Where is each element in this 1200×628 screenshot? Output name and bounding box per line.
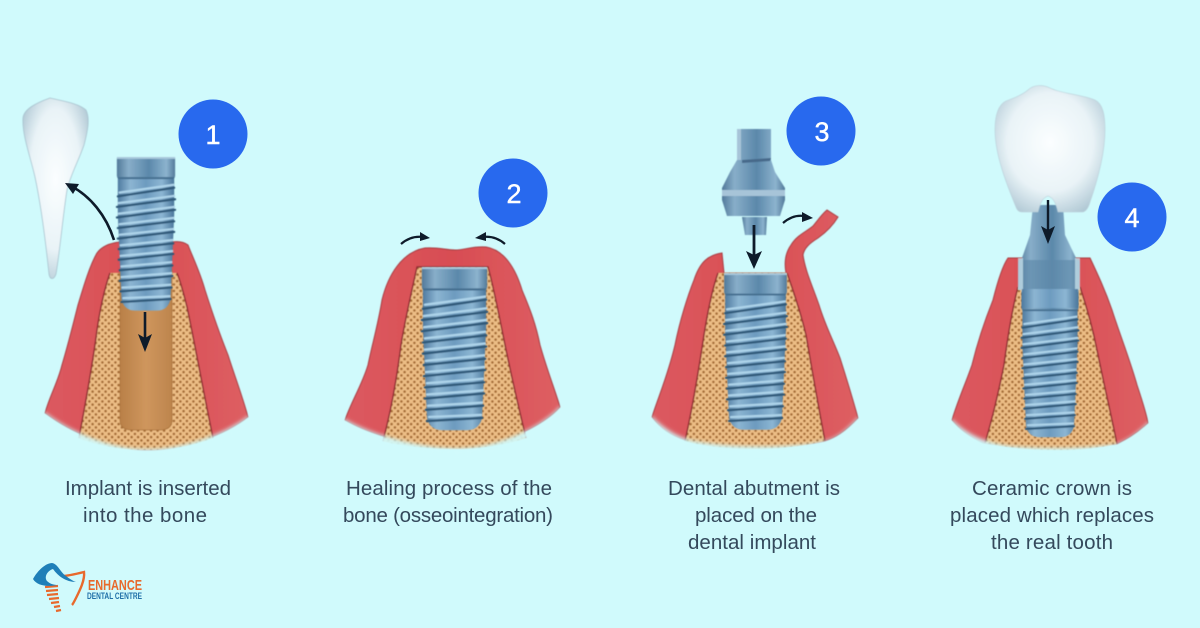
panel: step 2 healing: [342, 158, 563, 527]
gum and bone: final: [949, 258, 1151, 452]
caption 4: the real tooth: [991, 531, 1113, 554]
caption 1: into the bone: [83, 504, 207, 527]
number badge 1: [178, 100, 248, 168]
panel: step 1 implant inserted: [23, 98, 251, 527]
caption 2: Healing process of the: [346, 477, 552, 500]
implant screw 3: [724, 273, 787, 430]
caption 3: Dental abutment is: [668, 477, 840, 500]
caption 3: dental implant: [688, 531, 816, 554]
gum and bone: socket 1: [42, 242, 251, 453]
arrow: implant downward: [138, 312, 152, 352]
number badge 3: 3: [814, 117, 830, 147]
logo: Enhance Dental Centre: [33, 563, 142, 611]
caption 3: placed on the: [695, 504, 817, 527]
abutment seated: [1018, 205, 1080, 308]
caption 4: Ceramic crown is: [972, 477, 1132, 500]
abutment component: [722, 129, 785, 235]
arrow: tooth removed: [65, 183, 114, 240]
arrow: abutment downward: [746, 225, 762, 269]
arrow: gum closing right: [475, 232, 505, 244]
arrow: gum flap lifted: [783, 212, 813, 223]
panel: step 4 crown: [949, 86, 1166, 554]
number badge 2: 2: [506, 179, 522, 209]
panel: step 3 abutment: [649, 96, 861, 554]
implant screw 4: [1022, 290, 1078, 437]
number badge 4: 4: [1124, 203, 1140, 233]
gum and bone: opened flap: [649, 210, 861, 450]
caption 2: bone (osseointegration): [343, 504, 553, 527]
arrow: gum closing left: [401, 232, 430, 244]
implant screw 1: [117, 157, 175, 311]
implant screw 2: [422, 267, 487, 430]
number badge 2: [478, 158, 548, 228]
number badge 1: 1: [205, 120, 221, 150]
caption 4: placed which replaces: [950, 504, 1154, 527]
icon: ceramic crown: [995, 86, 1105, 212]
logo wordmark: DENTAL CENTRE: [87, 591, 142, 602]
number badge 4: [1098, 182, 1166, 252]
gum and bone: healed: [342, 247, 563, 452]
icon: logo tooth: [33, 563, 84, 611]
caption 1: Implant is inserted: [65, 477, 231, 500]
icon: extracted tooth: [23, 98, 88, 278]
number badge 3: [786, 96, 856, 166]
arrow: crown downward: [1041, 200, 1055, 244]
logo wordmark: ENHANCE: [88, 577, 142, 594]
